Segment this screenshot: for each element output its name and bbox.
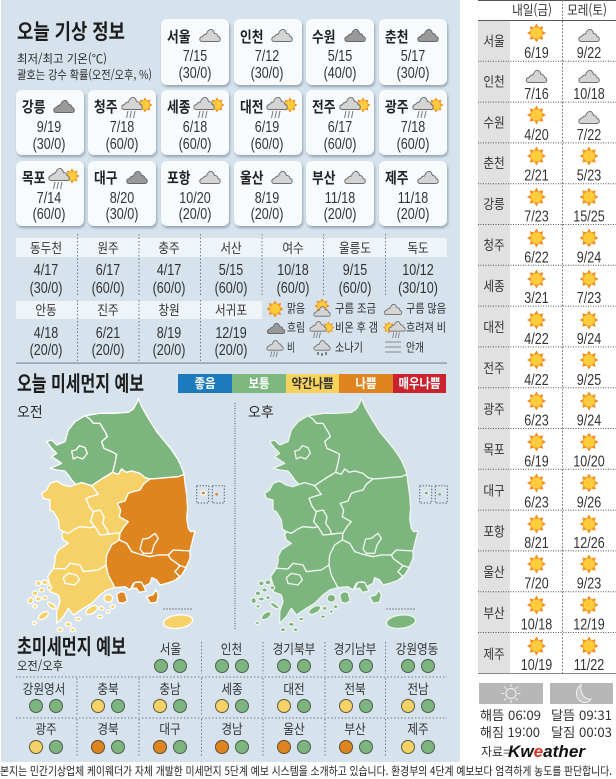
울산 xyxy=(278,718,310,754)
card: 수원: 수원 xyxy=(312,26,335,47)
row: 세종 xyxy=(483,270,601,306)
울릉도: 울릉도 xyxy=(339,237,371,257)
title: 초미세먼지 예보: 초미세먼지 예보 xyxy=(17,631,126,661)
row: 대구: 9/26 xyxy=(577,493,601,511)
여수: 여수 xyxy=(282,237,304,257)
sunrise / sunset / moonrise / moonset times xyxy=(480,705,612,741)
map divider xyxy=(234,403,236,630)
경북 xyxy=(92,718,124,754)
row: 포항: 포항 xyxy=(483,520,505,541)
weather icon legend xyxy=(266,298,446,357)
card: 울산: 울산 xyxy=(240,167,264,188)
source: Kweather: Kweather xyxy=(508,742,586,761)
안동: 4/18 xyxy=(34,324,58,341)
울릉도: 9/15 xyxy=(343,261,367,278)
경기남부: 경기남부 xyxy=(334,638,376,658)
서울: 서울 xyxy=(160,638,181,658)
label: 오전: 오전 xyxy=(17,402,43,422)
sunrise / sunset / moonrise / moonset times: 해뜸 06:09 xyxy=(480,705,541,724)
row: 대전: 4/22 xyxy=(524,330,549,347)
인천 xyxy=(216,638,248,672)
card: 서울: 7/15 xyxy=(183,47,207,64)
서산: (60/0) xyxy=(215,279,247,296)
card: 부산 xyxy=(306,161,374,226)
진주: (20/0) xyxy=(92,341,124,358)
city weather cards xyxy=(16,19,447,226)
대전: 대전 xyxy=(283,678,305,698)
row: 인천: 10/18 xyxy=(573,85,605,102)
진주: 6/21 xyxy=(96,324,120,341)
세종: 세종 xyxy=(221,678,243,698)
card: 강릉: 강릉 xyxy=(22,96,46,117)
서울 xyxy=(154,638,186,672)
row: 청주: 6/22 xyxy=(524,248,549,266)
card: 전주 xyxy=(306,90,374,155)
row: 광주: 9/24 xyxy=(577,411,601,429)
row: 대전 xyxy=(483,310,601,347)
card: 서울: 서울 xyxy=(167,26,191,47)
보통: 보통 xyxy=(248,373,270,392)
title: 오늘 기상 정보: 오늘 기상 정보 xyxy=(17,16,125,46)
row: 서울 xyxy=(483,24,601,61)
row: 청주 xyxy=(483,228,601,266)
충남: 충남 xyxy=(159,678,181,698)
card: 대전 xyxy=(234,90,302,155)
sunrise / sunset / moonrise / moonset times: 달뜸 09:31 xyxy=(551,705,612,724)
독도: (30/10) xyxy=(398,279,438,296)
row: 인천: 인천 xyxy=(483,70,505,91)
제주: 제주 xyxy=(407,718,429,738)
card: 광주: 7/18 xyxy=(401,118,425,135)
광주 xyxy=(30,718,62,754)
row: 강릉: 7/23 xyxy=(524,207,549,225)
card: 포항: (20/0) xyxy=(179,205,211,222)
row: 울산 xyxy=(483,554,601,592)
비 xyxy=(267,338,295,357)
서귀포: 서귀포 xyxy=(215,299,247,319)
card: 인천: (30/0) xyxy=(251,64,283,81)
card: 부산: (20/0) xyxy=(324,205,356,222)
card: 제주: 11/18 xyxy=(398,189,428,206)
강원영서: 강원영서 xyxy=(23,678,65,698)
강원영동: 강원영동 xyxy=(396,638,438,658)
row: 춘천: 5/23 xyxy=(577,166,601,184)
원주: (60/0) xyxy=(92,279,124,296)
sun times box xyxy=(479,683,543,704)
card: 청주: 청주 xyxy=(94,96,118,117)
전북: 전북 xyxy=(344,678,366,698)
전북 xyxy=(340,678,372,712)
여수: (60/0) xyxy=(277,279,309,296)
좋음 xyxy=(178,373,232,393)
card: 세종: 세종 xyxy=(167,96,191,117)
card: 부산: 부산 xyxy=(312,167,336,188)
row: 부산: 부산 xyxy=(483,602,505,622)
부산 xyxy=(340,718,372,754)
card: 인천: 7/12 xyxy=(255,47,279,64)
여수 xyxy=(277,237,309,296)
row: 목포: 목포 xyxy=(483,438,505,459)
비: 비 xyxy=(287,338,295,356)
충북 xyxy=(92,678,124,712)
부산: 부산 xyxy=(344,718,366,738)
row: 강릉: 강릉 xyxy=(483,193,505,213)
row: 부산 xyxy=(483,596,605,633)
row: 세종: 3/21 xyxy=(524,289,549,306)
울산: 울산 xyxy=(283,718,305,738)
card: 대전: (60/0) xyxy=(251,135,283,152)
small cities table xyxy=(16,234,447,362)
흐림 xyxy=(267,318,305,336)
row: 강릉: 15/25 xyxy=(573,207,605,225)
card: 강릉 xyxy=(16,90,84,155)
안동: 안동 xyxy=(35,299,57,319)
card: 울산 xyxy=(234,161,302,226)
구름 조금 xyxy=(314,298,376,316)
card: 대전: 6/19 xyxy=(255,118,279,135)
서산 xyxy=(215,237,247,296)
card: 울산: (20/0) xyxy=(251,205,283,222)
row: 춘천: 춘천 xyxy=(483,152,505,172)
card: 춘천: 춘천 xyxy=(385,26,408,47)
전남: 전남 xyxy=(407,678,429,698)
card: 세종 xyxy=(161,90,229,155)
row: 대전: 대전 xyxy=(483,316,505,336)
row: 광주 xyxy=(483,392,601,429)
충주: (60/0) xyxy=(153,279,185,296)
원주: 원주 xyxy=(97,237,119,257)
흐려져 비 xyxy=(383,318,446,338)
맑음 xyxy=(266,300,305,318)
card: 수원: (40/0) xyxy=(324,64,356,81)
경기북부: 경기북부 xyxy=(273,638,315,658)
background panel xyxy=(1,0,460,762)
나쁨 xyxy=(339,373,393,393)
매우나쁨: 매우나쁨 xyxy=(398,373,441,392)
row: 부산: 12/19 xyxy=(573,615,605,633)
충주 xyxy=(153,237,185,296)
row: 서울: 6/19 xyxy=(524,44,549,61)
동두천: 동두천 xyxy=(30,237,62,257)
card: 제주: 제주 xyxy=(385,167,409,188)
row: 서울: 9/22 xyxy=(577,44,601,61)
구름 많음 xyxy=(384,300,446,316)
창원: 창원 xyxy=(158,299,180,319)
나쁨: 나쁨 xyxy=(355,373,377,392)
row: 강릉 xyxy=(483,188,605,225)
진주 xyxy=(92,299,124,358)
row: 수원 xyxy=(483,106,601,143)
card: 대구: 8/20 xyxy=(110,189,134,206)
card: 목포: (60/0) xyxy=(33,205,65,222)
row: 수원: 7/22 xyxy=(577,126,601,143)
동두천: 4/17 xyxy=(34,261,58,278)
row: 대구 xyxy=(483,474,601,511)
row: 인천: 7/16 xyxy=(524,85,549,102)
card: 제주: (20/0) xyxy=(397,205,429,222)
세종 xyxy=(216,678,248,712)
여수: 10/18 xyxy=(277,261,309,278)
card: 인천: 인천 xyxy=(240,26,263,47)
row: 춘천: 2/21 xyxy=(524,166,549,184)
서산: 서산 xyxy=(220,237,242,257)
card: 춘천: 5/17 xyxy=(401,47,425,64)
card: 수원 xyxy=(306,19,374,85)
card: 전주: 6/17 xyxy=(328,118,352,135)
map: afternoon dust xyxy=(251,398,447,632)
dust level legend xyxy=(178,373,446,393)
경남: 경남 xyxy=(221,718,243,738)
광주: 광주 xyxy=(35,718,57,738)
row: 수원: 수원 xyxy=(483,111,505,132)
서귀포 xyxy=(215,299,247,358)
제주 xyxy=(402,718,434,754)
row: 대구: 대구 xyxy=(483,479,505,500)
대구: 대구 xyxy=(159,718,181,738)
row: 울산: 9/23 xyxy=(577,574,601,592)
충남 xyxy=(154,678,186,712)
card: 대구: (30/0) xyxy=(106,205,138,222)
구름 많음: 구름 많음 xyxy=(406,300,446,316)
sunrise / sunset / moonrise / moonset times: 해짐 19:00 xyxy=(480,722,540,741)
card: 세종: 6/18 xyxy=(183,118,207,135)
충주: 충주 xyxy=(158,237,180,257)
row: 세종: 세종 xyxy=(483,275,505,295)
독도 xyxy=(398,237,438,296)
독도: 10/12 xyxy=(402,261,434,278)
동두천 xyxy=(30,237,62,296)
경남 xyxy=(216,718,248,754)
원주: 6/17 xyxy=(96,261,120,278)
icon: moon xyxy=(576,684,591,703)
card: 춘천 xyxy=(379,19,447,85)
fine dust grid xyxy=(16,638,447,756)
row: 대전: 9/24 xyxy=(577,330,601,347)
card: 청주: 7/18 xyxy=(110,118,134,135)
좋음: 좋음 xyxy=(194,373,216,392)
row: 울산: 7/20 xyxy=(524,574,549,592)
card: 대구 xyxy=(88,161,156,226)
경북: 경북 xyxy=(97,718,119,738)
서귀포: 12/19 xyxy=(215,324,247,341)
전남 xyxy=(402,678,434,712)
row: 제주 xyxy=(483,636,604,673)
card: 서울 xyxy=(161,19,229,85)
card: 광주: (60/0) xyxy=(397,135,429,152)
card: 강릉: (30/0) xyxy=(33,135,65,152)
row: 제주: 11/22 xyxy=(574,656,604,673)
울릉도: (60/0) xyxy=(339,279,371,296)
동두천: (30/0) xyxy=(30,279,62,296)
충북: 충북 xyxy=(97,678,119,698)
label: 오전/오후: 오전/오후 xyxy=(17,657,63,674)
흐림: 흐림 xyxy=(287,318,305,336)
right forecast table xyxy=(478,0,616,674)
map: morning dust xyxy=(28,398,224,632)
흐려져 비: 흐려져 비 xyxy=(406,318,446,336)
source: Kweather: 자료= xyxy=(481,743,510,760)
card: 울산: 8/19 xyxy=(255,189,279,206)
구름 조금: 구름 조금 xyxy=(335,300,376,316)
row: 포항: 12/26 xyxy=(573,534,605,551)
title: 오늘 미세먼지 예보: 오늘 미세먼지 예보 xyxy=(17,368,144,398)
card: 포항: 10/20 xyxy=(179,189,211,206)
row: 세종: 7/23 xyxy=(577,289,601,306)
창원: (20/0) xyxy=(153,341,185,358)
안개: 안개 xyxy=(406,338,424,356)
row: 서울: 서울 xyxy=(483,30,505,50)
row: 광주: 6/23 xyxy=(524,411,549,429)
안동: (20/0) xyxy=(30,341,62,358)
보통 xyxy=(232,373,286,393)
강원영동 xyxy=(396,638,438,672)
row: 제주: 10/19 xyxy=(521,656,552,673)
강원영서 xyxy=(23,678,65,712)
moon times box xyxy=(550,683,613,704)
card: 부산: 11/18 xyxy=(325,189,355,206)
row: 부산: 10/18 xyxy=(521,615,552,633)
독도: 독도 xyxy=(407,237,429,257)
소나기: 소나기 xyxy=(335,338,363,356)
row: 전주: 4/22 xyxy=(524,371,549,388)
안동 xyxy=(30,299,62,358)
row: 광주: 광주 xyxy=(483,398,505,418)
서산: 5/15 xyxy=(219,261,243,278)
row: 목포: 6/19 xyxy=(524,452,549,470)
card: 목포: 목포 xyxy=(22,167,46,188)
울릉도 xyxy=(339,237,371,296)
card: 춘천: (30/0) xyxy=(397,64,429,81)
card: 전주: 전주 xyxy=(312,96,336,117)
원주 xyxy=(92,237,124,296)
card: 목포 xyxy=(16,161,84,226)
대구 xyxy=(154,718,186,754)
row: 대구: 6/23 xyxy=(524,493,549,511)
서귀포: (20/0) xyxy=(215,341,247,358)
card: 서울: (30/0) xyxy=(179,64,211,81)
row: 목포 xyxy=(483,432,605,470)
sunrise / sunset / moonrise / moonset times: 달짐 00:03 xyxy=(551,722,612,741)
비온 후 갬 xyxy=(310,318,378,338)
card: 포항: 포항 xyxy=(167,167,191,188)
card: 청주 xyxy=(88,90,156,155)
card: 광주: 광주 xyxy=(385,96,409,117)
창원 xyxy=(153,299,185,358)
card: 인천 xyxy=(234,19,302,85)
card: 전주: (60/0) xyxy=(324,135,356,152)
경기북부 xyxy=(273,638,315,672)
subtitle text xyxy=(17,50,152,83)
card: 강릉: 9/19 xyxy=(37,118,61,135)
진주: 진주 xyxy=(97,299,119,319)
경기남부 xyxy=(334,638,376,672)
안개 xyxy=(385,338,424,356)
card: 대구: 대구 xyxy=(94,167,118,188)
card: 목포: 7/14 xyxy=(37,189,61,206)
card: 세종: (60/0) xyxy=(179,135,211,152)
row: 포항: 8/21 xyxy=(524,534,549,551)
row: 포항 xyxy=(483,514,605,551)
충주: 4/17 xyxy=(157,261,181,278)
row: 춘천 xyxy=(483,146,601,184)
card: 제주 xyxy=(379,161,447,226)
row: 청주: 청주 xyxy=(483,234,505,254)
card: 대전: 대전 xyxy=(240,96,263,117)
약간나쁨: 약간나쁨 xyxy=(291,373,334,392)
row: 인천 xyxy=(483,70,605,102)
card: 포항 xyxy=(161,161,229,226)
row: 수원: 4/20 xyxy=(524,126,549,143)
비온 후 갬: 비온 후 갬 xyxy=(335,318,378,336)
card: 광주 xyxy=(379,90,447,155)
row: 울산: 울산 xyxy=(483,561,505,581)
card: 수원: 5/15 xyxy=(328,47,352,64)
row: 전주 xyxy=(483,350,601,388)
card: 청주: (60/0) xyxy=(106,135,138,152)
divider xyxy=(16,362,447,364)
row: 전주: 전주 xyxy=(483,357,505,377)
icon: sun outline xyxy=(502,684,520,703)
row: 제주: 제주 xyxy=(483,643,505,663)
창원: 8/19 xyxy=(157,324,181,341)
row: 전주: 9/25 xyxy=(577,371,601,388)
subtitle text: 괄호는 강수 확률(오전/오후, %) xyxy=(17,66,152,83)
대전 xyxy=(278,678,310,712)
인천: 인천 xyxy=(221,638,242,658)
row: 청주: 9/24 xyxy=(577,248,601,266)
소나기 xyxy=(314,338,363,356)
subtitle text: 최저/최고 기온(℃) xyxy=(17,50,107,67)
row: 목포: 10/20 xyxy=(573,452,605,470)
맑음: 맑음 xyxy=(287,300,305,316)
label: 오후: 오후 xyxy=(248,402,274,422)
